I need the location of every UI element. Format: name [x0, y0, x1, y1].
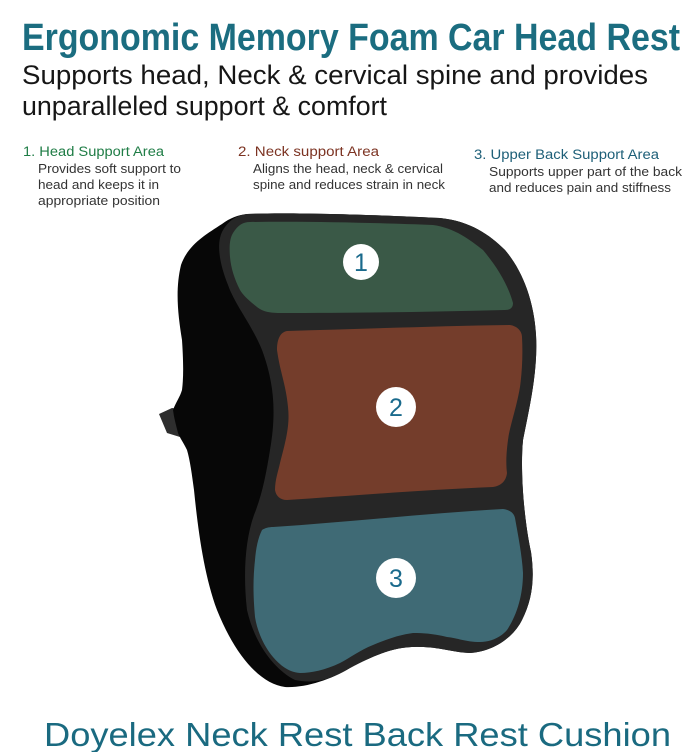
callout: neck support area: spine and reduces strain in neck — [253, 178, 446, 192]
zone 1: head, green — [230, 222, 513, 313]
callout: head support area: head and keeps it in — [38, 178, 159, 192]
strap buckle — [159, 408, 186, 437]
callout: neck support area: Aligns the head, neck & cervical — [253, 162, 443, 176]
callout: head support area: 1. Head Support Area — [23, 144, 165, 159]
cushion illustration — [159, 213, 536, 687]
marker 3 — [376, 558, 416, 598]
callout: head support area: appropriate position — [38, 194, 160, 208]
footer product name: Doyelex Neck Rest Back Rest Cushion — [44, 716, 671, 752]
subtitle: unparalleled support & comfort — [22, 91, 387, 121]
cushion front face — [219, 213, 536, 682]
callout: upper back support area: Supports upper part of the back — [489, 165, 683, 179]
callout: neck support area: 2. Neck support Area — [238, 144, 380, 159]
callout: upper back support area — [474, 147, 683, 195]
zone 2: neck, brown — [275, 325, 522, 500]
marker 1 — [343, 244, 379, 280]
subtitle — [22, 60, 648, 121]
marker 3: 3 — [389, 565, 403, 593]
callout: upper back support area: and reduces pain and stiffness — [489, 181, 671, 195]
marker 2 — [376, 387, 416, 427]
marker 1: 1 — [354, 249, 368, 277]
callout: neck support area — [238, 144, 446, 192]
callout: head support area — [23, 144, 181, 208]
callout: head support area: Provides soft support to — [38, 162, 181, 176]
zone 3: upper back, teal — [254, 509, 523, 673]
marker 2: 2 — [389, 394, 403, 422]
callout: upper back support area: 3. Upper Back Support Area — [474, 147, 660, 162]
subtitle: Supports head, Neck & cervical spine and provides — [22, 60, 648, 90]
cushion body — [173, 213, 536, 687]
